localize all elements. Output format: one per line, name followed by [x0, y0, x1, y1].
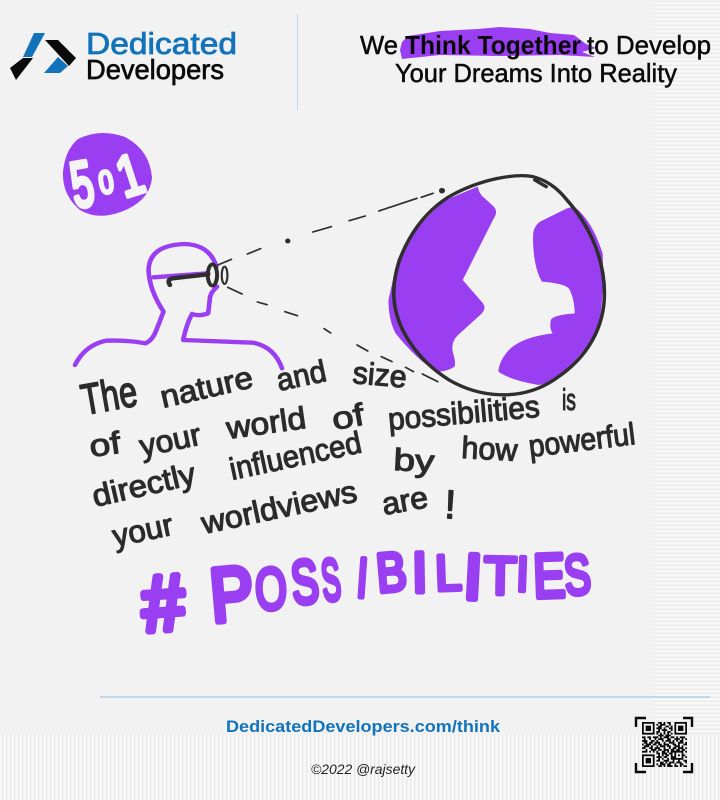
- icon: logo mark: [10, 33, 76, 80]
- hashtag: #POSSIBILITIES: E: [532, 541, 566, 611]
- handwritten message: !: [444, 482, 457, 528]
- badge: 501: [63, 133, 152, 222]
- hashtag: #POSSIBILITIES: B: [374, 541, 409, 604]
- badge: 501: 1: [108, 141, 151, 210]
- glasses: [169, 264, 227, 286]
- handwritten message: how: [461, 430, 519, 468]
- hashtag: #POSSIBILITIES: I: [411, 540, 428, 604]
- handwritten message: and: [273, 353, 329, 398]
- hashtag: #POSSIBILITIES: [139, 540, 593, 649]
- handwritten message: are: [379, 479, 431, 522]
- hashtag: #POSSIBILITIES: O: [254, 555, 288, 623]
- footer link: DedicatedDevelopers.com/think: [226, 717, 501, 736]
- logo: Dedicated Developers: [10, 26, 237, 85]
- hashtag: #POSSIBILITIES: S: [562, 543, 593, 608]
- handwritten message: size: [351, 355, 408, 395]
- hashtag: #POSSIBILITIES: S: [318, 546, 344, 614]
- right continent: [498, 207, 603, 385]
- hashtag: #POSSIBILITIES: S: [288, 547, 322, 619]
- tagline: [360, 27, 711, 88]
- handwritten message: The: [77, 367, 141, 424]
- illustration: person looking at world: [75, 176, 604, 395]
- handwritten message: influenced: [226, 425, 365, 487]
- hashtag: #POSSIBILITIES: I: [462, 540, 484, 613]
- left continent: [388, 187, 496, 372]
- handwritten message: by: [393, 442, 436, 479]
- handwritten message: your: [109, 507, 176, 554]
- handwritten message: your: [136, 417, 204, 464]
- handwritten message: of: [329, 397, 367, 437]
- hashtag: #POSSIBILITIES: I: [515, 546, 530, 602]
- tagline: Think Together: [405, 30, 581, 60]
- hashtag: #POSSIBILITIES: I: [355, 547, 370, 610]
- logo wordmark: Developers: [86, 54, 224, 85]
- tagline: Your Dreams Into Reality: [395, 58, 677, 88]
- handwritten message: is: [562, 382, 576, 417]
- globe: [388, 176, 604, 395]
- QR code: [636, 718, 692, 772]
- globe outline: [394, 176, 604, 395]
- copyright: ©2022 @rajsetty: [311, 761, 416, 777]
- handwritten message: worldviews: [197, 474, 360, 541]
- handwritten message: [77, 353, 637, 554]
- hashtag: #POSSIBILITIES: #: [139, 558, 187, 649]
- handwritten message: of: [87, 425, 123, 464]
- handwritten message: directly: [89, 456, 199, 514]
- hashtag: #POSSIBILITIES: P: [207, 549, 257, 638]
- handwritten message: powerful: [527, 416, 637, 464]
- head and shoulders outline: [75, 244, 282, 368]
- handwritten message: possibilities: [387, 389, 541, 437]
- tagline text: We: [360, 30, 398, 60]
- person: [75, 189, 444, 382]
- brush highlight: [400, 27, 596, 59]
- badge: 501: 5: [65, 148, 99, 222]
- hashtag: #POSSIBILITIES: T: [484, 547, 517, 606]
- logo wordmark: Dedicated: [86, 26, 237, 61]
- logo wordmark: [86, 26, 237, 85]
- hashtag: #POSSIBILITIES: L: [434, 545, 463, 602]
- badge: 501: 0: [96, 165, 116, 202]
- handwritten message: world: [223, 400, 308, 446]
- sight lines: [218, 189, 444, 382]
- tagline: to Develop: [587, 30, 711, 60]
- handwritten message: nature: [157, 360, 256, 415]
